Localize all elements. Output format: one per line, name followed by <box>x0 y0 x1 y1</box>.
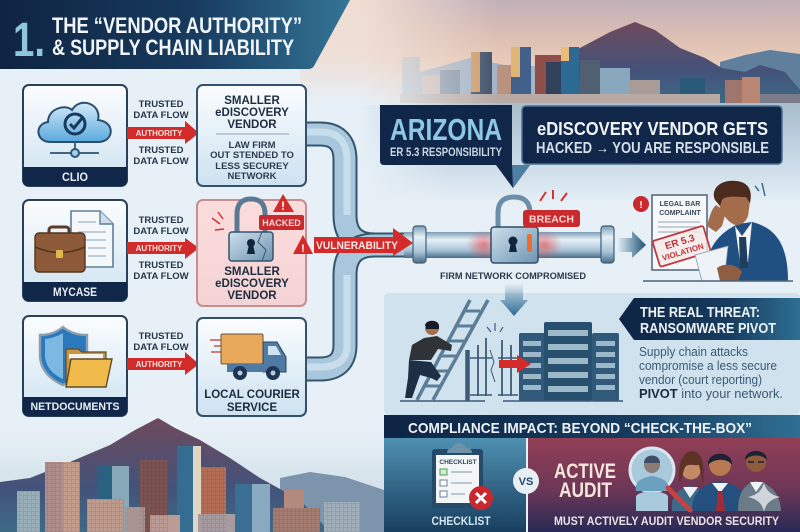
audit team people <box>672 451 781 512</box>
callout: vendor hacked: eDISCOVERY VENDOR GETS <box>537 119 768 139</box>
VS badge: VS <box>519 476 533 488</box>
card: smaller eDiscovery vendor: LESS SECUREY <box>215 161 289 172</box>
flow: MyCase to vendor: DATA FLOW <box>133 271 189 282</box>
background: sunset sky and water <box>300 0 800 204</box>
flow: Clio to vendor: TRUSTED <box>139 145 184 156</box>
bar complaint document: COMPLAINT <box>659 210 702 217</box>
threat heading tag: RANSOMWARE PIVOT <box>640 321 776 337</box>
icon: broken fence <box>468 323 518 401</box>
label: breach: BREACH <box>529 214 574 226</box>
stamp: ER 5.3 violation: ER 5.3 <box>664 233 697 252</box>
icon: clipboard checklist: CHECKLIST <box>439 459 477 466</box>
stamp: ER 5.3 violation <box>652 226 711 267</box>
threat body text: Supply chain attacks <box>639 345 748 359</box>
icon: clipboard checklist <box>432 443 493 510</box>
card: NetDocuments <box>23 316 127 416</box>
bottom-left Phoenix skyline <box>0 418 384 532</box>
flow: MyCase to vendor: TRUSTED <box>139 215 184 226</box>
card: hacked vendor: eDISCOVERY <box>215 278 289 290</box>
flow: NetDocuments to courier <box>127 331 199 375</box>
arrow: red pivot <box>499 355 531 373</box>
top skyline: city buildings <box>400 47 800 103</box>
label: must actively audit vendor security: MUST ACTIVELY AUDIT VENDOR SECURITY <box>554 514 779 528</box>
icon: document and briefcase <box>35 211 113 272</box>
card: MyCase <box>23 200 127 301</box>
card: smaller eDiscovery vendor <box>197 85 306 186</box>
icon: cracked padlock <box>212 199 273 261</box>
card: smaller eDiscovery vendor: NETWORK <box>227 171 277 182</box>
card: local courier service <box>197 318 306 416</box>
icon: delivery truck <box>210 334 286 380</box>
label: checklist: CHECKLIST <box>432 514 491 528</box>
icon: warning triangle: ! <box>281 199 285 213</box>
pipes connecting vendors to main line <box>306 132 420 369</box>
header number: 1. <box>13 14 45 67</box>
callout: vendor hacked <box>522 106 782 164</box>
card: hacked vendor <box>197 194 306 306</box>
threat body text: PIVOT into your network. <box>639 387 783 401</box>
threat body text: vendor (court reporting) <box>639 373 762 387</box>
threat body text <box>639 345 783 401</box>
arrow: to attorney <box>617 231 646 258</box>
flow: Clio to vendor: AUTHORITY <box>136 129 183 138</box>
header title: & SUPPLY CHAIN LIABILITY <box>52 35 294 60</box>
ER 5.3 subheading: ER 5.3 RESPONSIBILITY <box>390 145 502 159</box>
label: Clio: CLIO <box>62 172 88 184</box>
label: NetDocuments: NETDOCUMENTS <box>30 401 120 413</box>
icon: shield and folder <box>40 327 112 387</box>
label: MyCase: MYCASE <box>53 287 97 299</box>
card: smaller eDiscovery vendor: SMALLER <box>224 95 280 107</box>
main firm network pipe with breach <box>404 190 614 263</box>
flow: MyCase to vendor: DATA FLOW <box>133 226 189 237</box>
icon: breached padlock <box>491 197 538 263</box>
flow: MyCase to vendor: AUTHORITY <box>136 244 183 253</box>
vulnerability arrow <box>293 228 413 256</box>
compliance impact banner <box>384 415 800 438</box>
vulnerability arrow: ! <box>301 243 305 255</box>
active audit heading: ACTIVE <box>554 460 616 483</box>
flow: Clio to vendor: DATA FLOW <box>133 156 189 167</box>
flow: NetDocuments to courier: AUTHORITY <box>136 360 183 369</box>
panel: real threat <box>384 283 800 415</box>
card: local courier service: SERVICE <box>227 402 277 414</box>
label: hacked: HACKED <box>262 218 301 228</box>
stamp: ER 5.3 violation: VIOLATION <box>661 242 705 263</box>
icon: cloud with check <box>38 103 111 157</box>
threat heading tag: THE REAL THREAT: <box>640 305 760 321</box>
card: smaller eDiscovery vendor: OUT STENDED TO <box>210 150 294 161</box>
card: smaller eDiscovery vendor: eDISCOVERY <box>215 107 289 119</box>
vulnerability arrow: VULNERABILITY <box>316 240 399 252</box>
icon: red alert badge: ! <box>639 200 643 211</box>
label: breach <box>523 190 580 227</box>
stressed attorney <box>643 181 793 281</box>
bar complaint document: LEGAL BAR <box>660 201 700 208</box>
header title <box>52 13 302 60</box>
flow: MyCase to vendor: TRUSTED <box>139 260 184 271</box>
arrow: down to threat panel <box>500 283 528 316</box>
label: firm network compromised: FIRM NETWORK COMPROMISED <box>440 271 586 282</box>
card: hacked vendor: VENDOR <box>227 290 277 302</box>
compliance impact banner: COMPLIANCE IMPACT: BEYOND “CHECK-THE-BOX” <box>408 420 752 437</box>
bar complaint document <box>633 195 711 270</box>
top skyline: distant hills and mountain <box>420 22 800 103</box>
flow: NetDocuments to courier: DATA FLOW <box>133 342 189 353</box>
icon: burglar on ladder <box>405 300 488 400</box>
active audit heading <box>554 460 616 502</box>
card: smaller eDiscovery vendor: VENDOR <box>227 119 277 131</box>
threat body text: compromise a less secure <box>639 359 777 373</box>
flow: Clio to vendor: DATA FLOW <box>133 110 189 121</box>
card: local courier service: LOCAL COURIER <box>204 389 301 401</box>
icon: magnifying glass <box>630 448 690 511</box>
flow: MyCase to vendor <box>127 215 199 282</box>
header title: THE “VENDOR AUTHORITY” <box>52 13 302 38</box>
threat heading tag <box>619 298 800 340</box>
Arizona heading: ARIZONA <box>390 112 502 147</box>
header banner <box>0 0 350 69</box>
panel: active audit <box>528 438 800 532</box>
panel: checklist <box>384 438 526 532</box>
card: smaller eDiscovery vendor: LAW FIRM <box>229 140 276 151</box>
card: Clio <box>23 85 127 186</box>
icon: server racks <box>519 322 619 401</box>
flow: Clio to vendor: TRUSTED <box>139 99 184 110</box>
flow: Clio to vendor <box>127 99 199 167</box>
flow: NetDocuments to courier: TRUSTED <box>139 331 184 342</box>
Arizona callout <box>380 105 530 188</box>
card: hacked vendor: SMALLER <box>224 266 280 278</box>
active audit heading: AUDIT <box>559 479 612 502</box>
VS badge <box>513 468 539 494</box>
